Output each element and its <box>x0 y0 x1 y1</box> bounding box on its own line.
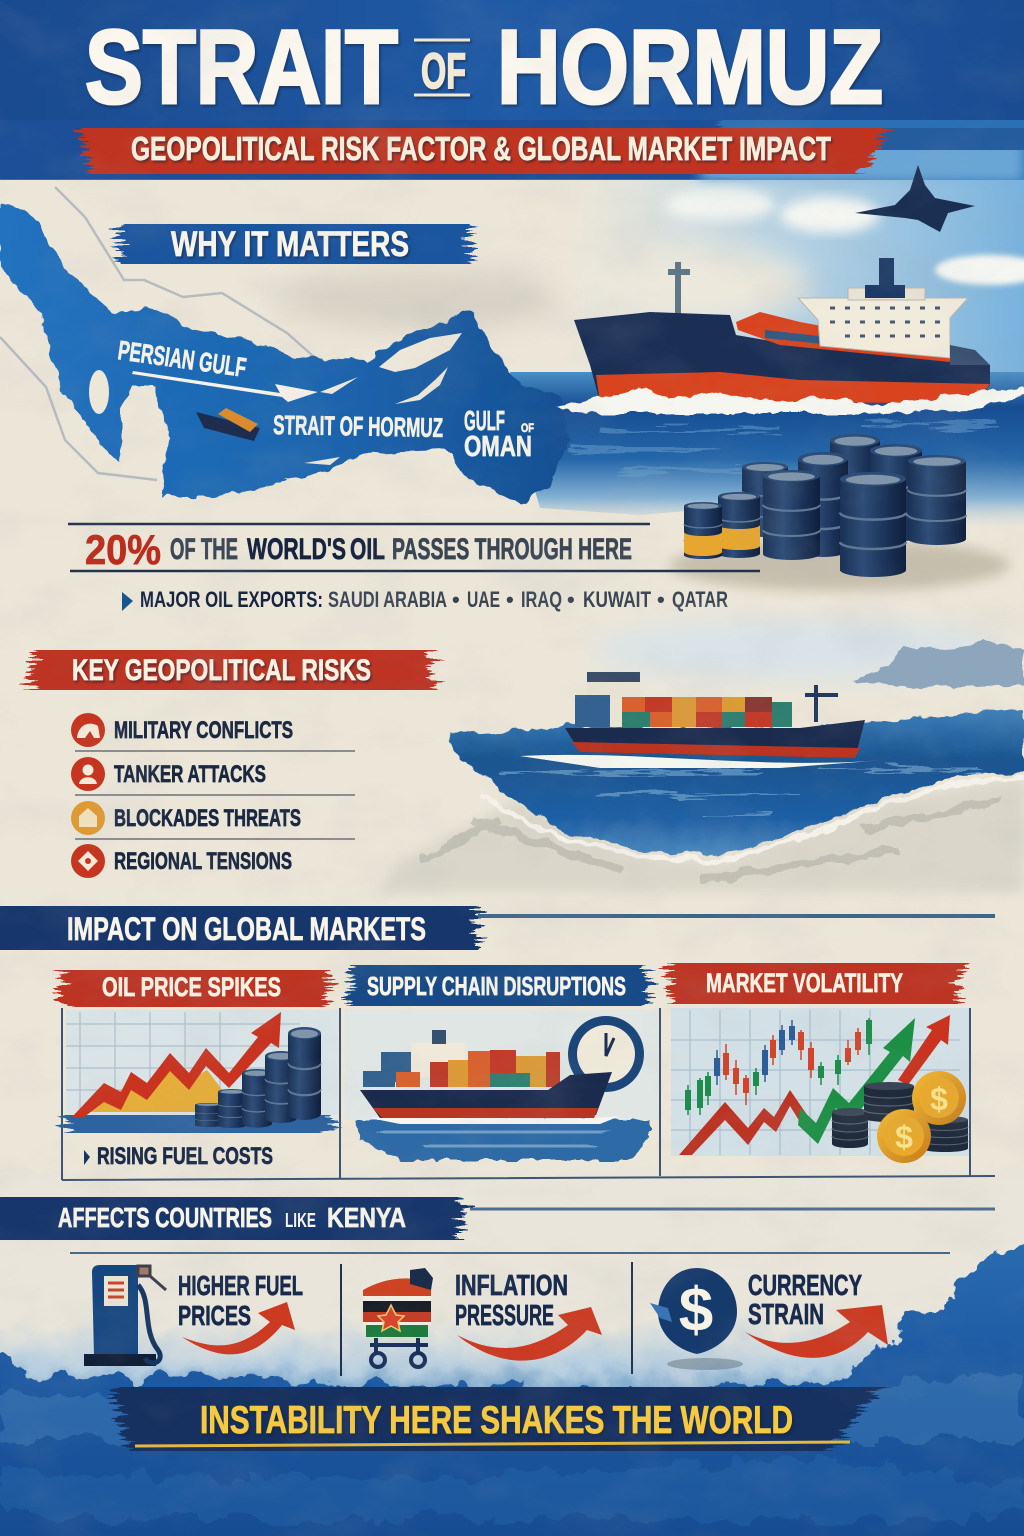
title: HORMUZ <box>497 9 883 126</box>
icon: coins and stacks <box>832 1071 968 1163</box>
map labels: PERSIAN GULF <box>116 335 248 383</box>
panel: oil price spikes <box>62 970 338 1170</box>
title: STRAIT <box>85 9 398 126</box>
map of the gulf <box>0 187 570 508</box>
note: rising fuel costs: RISING FUEL COSTS <box>97 1143 273 1170</box>
map labels: GULF <box>464 405 505 436</box>
risk: tanker attacks <box>71 757 266 791</box>
ribbon: oil price spikes <box>62 970 328 1007</box>
icon: fuel pump <box>84 1265 166 1366</box>
map labels: STRAIT OF HORMUZ <box>273 410 443 443</box>
lower blue wash <box>0 1170 1024 1536</box>
risk: regional tensions: REGIONAL TENSIONS <box>114 848 292 875</box>
section heading: affects countries like kenya: LIKE <box>285 1210 316 1232</box>
major oil exporters: SAUDI ARABIA <box>328 587 447 612</box>
conclusion banner: INSTABILITY HERE SHAKES THE WORLD <box>200 1399 793 1442</box>
ship foam <box>555 388 1024 414</box>
market panels frame <box>62 1008 995 1180</box>
impact: higher fuel prices: PRICES <box>178 1300 251 1331</box>
impact: inflation pressure: PRESSURE <box>455 1300 554 1332</box>
stat: 20% of world's oil: WORLD'S <box>247 533 346 566</box>
section heading: key geopolitical risks <box>32 650 432 690</box>
map labels: OMAN <box>464 431 532 463</box>
stat: 20% of world's oil: PASSES THROUGH HERE <box>392 533 632 566</box>
container ship <box>520 672 885 768</box>
risk: military conflicts <box>71 713 293 747</box>
icon: stacked barrels <box>195 1027 321 1128</box>
icon: dollar pin: $ <box>679 1276 713 1345</box>
risk: military conflicts: MILITARY CONFLICTS <box>114 717 293 744</box>
arrow: green rising arrow <box>798 1018 915 1144</box>
icon: fighter jet <box>855 165 975 232</box>
risk: blockades threats: BLOCKADES THREATS <box>114 805 301 832</box>
major oil exporters: IRAQ <box>521 587 562 612</box>
note: rising fuel costs <box>84 1143 273 1170</box>
impact: inflation pressure: INFLATION <box>455 1270 568 1302</box>
icon: small tanker on map <box>196 408 260 441</box>
section heading: affects countries like kenya: AFFECTS COUNTRIES <box>58 1202 272 1233</box>
arrow: currency up <box>745 1305 888 1358</box>
map labels: OF <box>521 421 534 435</box>
impact: currency strain <box>650 1268 888 1370</box>
header banner <box>0 0 1024 182</box>
chart: price area <box>88 1062 230 1112</box>
arrow: inflation up <box>457 1307 602 1361</box>
stat: 20% of world's oil <box>68 524 760 573</box>
ribbon: supply chain disruptions <box>349 965 648 1006</box>
ribbon: supply chain disruptions: SUPPLY CHAIN DISRUPTIONS <box>367 971 626 1001</box>
risk: blockades threats <box>71 801 301 835</box>
stat: 20% of world's oil: OF THE <box>170 533 238 566</box>
section heading: impact on global markets: IMPACT ON GLOBAL MARKETS <box>67 911 426 947</box>
section heading: key geopolitical risks: KEY GEOPOLITICAL RISKS <box>72 654 371 687</box>
major oil exporters: MAJOR OIL EXPORTS: <box>140 587 323 612</box>
major oil exporters: • <box>567 587 575 612</box>
ribbon: market volatility: MARKET VOLATILITY <box>706 968 903 998</box>
major oil exporters: • <box>452 587 460 612</box>
impact: inflation pressure <box>363 1268 602 1367</box>
major oil exporters: • <box>506 587 514 612</box>
oil barrels cluster <box>670 434 1010 591</box>
section heading: affects countries like kenya <box>0 1197 995 1253</box>
risk: tanker attacks: TANKER ATTACKS <box>114 761 266 788</box>
panel: market volatility <box>669 963 969 1163</box>
scenery: gulf sea and coast <box>380 620 1024 892</box>
cargo ship <box>360 1030 612 1118</box>
icon: coins and stacks: $ <box>930 1081 948 1117</box>
ribbon: oil price spikes: OIL PRICE SPIKES <box>102 972 281 1002</box>
stat: 20% of world's oil: OIL <box>350 533 385 566</box>
arrow: red rising arrow <box>898 1015 950 1085</box>
section heading: impact on global markets <box>0 906 995 950</box>
title <box>85 9 883 126</box>
impact: currency strain: CURRENCY <box>748 1270 862 1302</box>
impact: currency strain: STRAIN <box>748 1299 824 1331</box>
panel: supply chain disruptions <box>345 965 658 1160</box>
conclusion banner <box>112 1387 880 1451</box>
sea under ship <box>355 1116 650 1160</box>
tanker ship <box>555 258 1024 414</box>
section heading: affects countries like kenya: KENYA <box>327 1202 406 1233</box>
stat: 20% of world's oil: 20% <box>85 526 161 573</box>
subtitle ribbon <box>78 128 888 174</box>
section heading: why it matters: WHY IT MATTERS <box>171 225 409 264</box>
risk list <box>71 713 355 878</box>
major oil exporters: QATAR <box>672 587 728 612</box>
arrow: route through strait <box>132 371 318 402</box>
icon: delay clock <box>568 1016 644 1092</box>
sea behind tanker <box>510 372 1024 530</box>
major oil exporters <box>122 587 728 612</box>
ribbon: market volatility <box>669 963 958 1004</box>
sky and clouds <box>280 180 1024 380</box>
chart: rising zigzag arrow <box>72 1012 281 1117</box>
icon: coins and stacks: $ <box>895 1119 913 1155</box>
risk: regional tensions <box>71 844 292 878</box>
chart: red falling line <box>679 1090 812 1155</box>
title: OF <box>421 43 466 99</box>
chart: candlesticks <box>685 1018 872 1115</box>
icon: shopping cart with kenyan flag <box>363 1268 433 1367</box>
impact: higher fuel prices: HIGHER FUEL <box>178 1270 303 1301</box>
major oil exporters: • <box>657 587 665 612</box>
kenya dividers <box>341 1262 632 1376</box>
arrow: fuel prices up <box>182 1302 295 1354</box>
major oil exporters: UAE <box>467 587 500 612</box>
major oil exporters: KUWAIT <box>583 587 651 612</box>
map labels <box>116 335 534 463</box>
icon: dollar pin <box>650 1268 743 1370</box>
impact: higher fuel prices <box>84 1265 303 1366</box>
